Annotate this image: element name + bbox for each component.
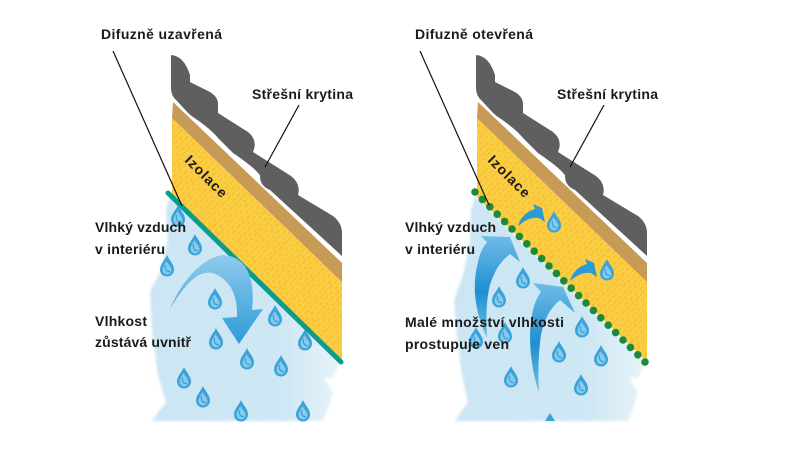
label: Difuzně otevřená: Difuzně otevřená — [415, 26, 533, 42]
label: Vlhkost zůstává uvnitř: zůstává uvnitř — [95, 334, 192, 350]
label: Střešní krytina: Střešní krytina — [557, 86, 658, 102]
leader line: roof covering — [570, 105, 604, 167]
label: Vlhký vzduch v interiéru — [95, 219, 186, 257]
leader line: roof covering — [265, 105, 299, 167]
label: Vlhkost zůstává uvnitř — [95, 313, 192, 350]
label: Vlhký vzduch v interiéru: Vlhký vzduch — [405, 219, 496, 235]
partial drop at panel base — [545, 413, 555, 421]
label: Izolace: Izolace — [485, 152, 534, 201]
label: Vlhký vzduch v interiéru: v interiéru — [95, 241, 165, 257]
label: Vlhký vzduch v interiéru: Vlhký vzduch — [95, 219, 186, 235]
interior humid air — [150, 196, 340, 421]
interior humid air — [454, 196, 645, 421]
leader line: diffusion-closed — [113, 51, 182, 206]
arrow: moisture rising left — [475, 236, 520, 338]
icon: roof layers — [476, 55, 647, 362]
label: Malé množství vlhkosti prostupuje ven — [405, 314, 564, 352]
label: Střešní krytina: Střešní krytina — [252, 86, 353, 102]
leader line: diffusion-open — [420, 51, 489, 205]
arrow: moisture rising right — [530, 283, 575, 393]
membrane: green dots — [471, 188, 649, 366]
label: Difuzně uzavřená: Difuzně uzavřená — [101, 26, 222, 42]
label: Vlhkost zůstává uvnitř: Vlhkost — [95, 313, 147, 329]
vapour barrier membrane — [168, 193, 341, 362]
panel: diffusion-closed roof — [95, 26, 353, 422]
label: Vlhký vzduch v interiéru — [405, 219, 496, 257]
arrow: moisture passing through lower — [570, 259, 597, 281]
arrow: moisture stays inside — [170, 255, 263, 344]
label: Izolace: Izolace — [182, 152, 231, 201]
label: Malé množství vlhkosti prostupuje ven: Malé množství vlhkosti — [405, 314, 564, 330]
moisture drops — [160, 205, 312, 422]
icon: roof layers — [171, 55, 342, 362]
label: Vlhký vzduch v interiéru: v interiéru — [405, 241, 475, 257]
panel: diffusion-open roof — [405, 26, 658, 421]
label: Malé množství vlhkosti prostupuje ven: prostupuje ven — [405, 336, 509, 352]
moisture drops — [469, 211, 614, 396]
arrow: moisture passing through upper — [518, 204, 545, 226]
